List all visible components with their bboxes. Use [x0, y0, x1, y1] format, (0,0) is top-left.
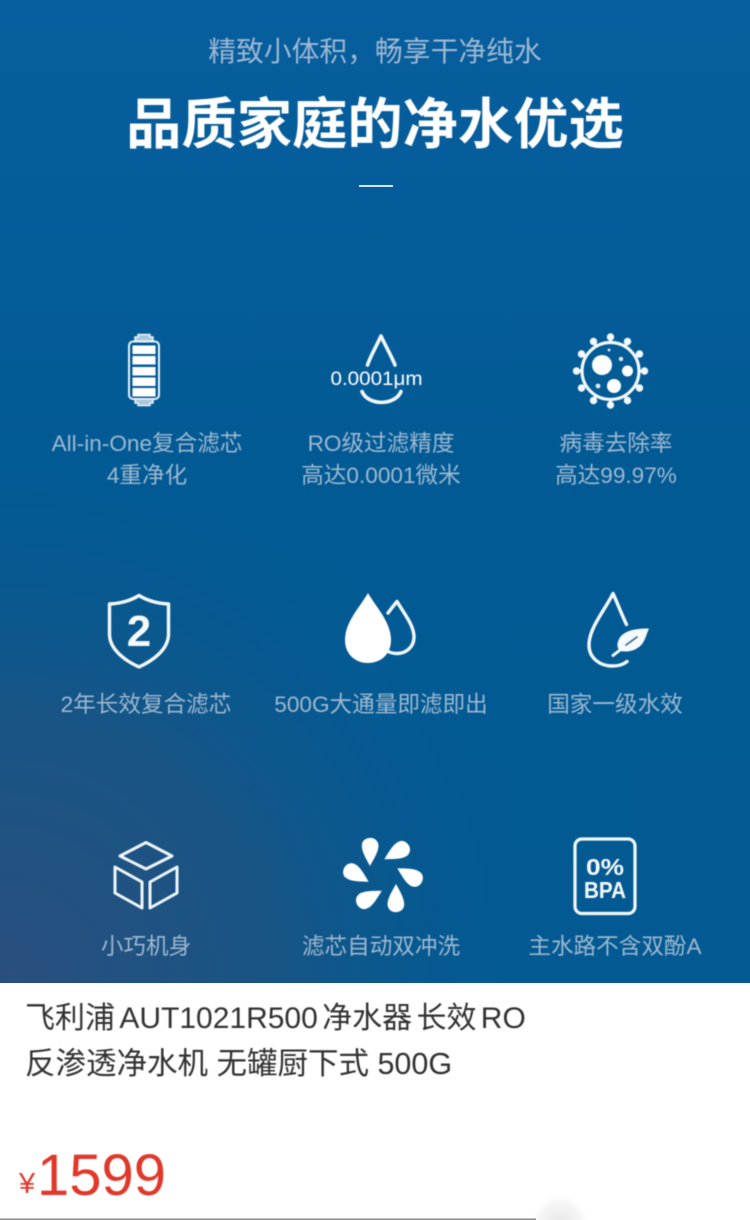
feature: compact body [101, 842, 191, 959]
label: four-stage purification: 4重净化 [107, 463, 187, 488]
icon: droplet with micron value [330, 336, 422, 402]
label: compact body: 小巧机身 [101, 934, 191, 959]
label: all-in-one filter: All-in-One复合滤芯 [52, 431, 242, 456]
price: 1599 [37, 1143, 166, 1208]
icon: 0% BPA badge: BPA [584, 877, 626, 903]
label: auto flush: 滤芯自动双冲洗 [302, 934, 460, 959]
bottom edge smudge [530, 1192, 590, 1220]
feature: BPA free [528, 839, 703, 959]
bottom edge line [0, 1218, 536, 1220]
icon: filter cartridge [129, 334, 159, 406]
label: removal rate: 高达99.97% [555, 463, 677, 488]
panel: product info [0, 983, 750, 1220]
icon: droplet with leaf [589, 594, 649, 666]
feature: two-year filter [61, 596, 231, 717]
feature: water efficiency [547, 594, 683, 717]
price: ¥ [18, 1168, 36, 1200]
icon: virus [574, 335, 647, 407]
product name line 2: 反渗透净水机 无罐厨下式 500G [25, 1047, 452, 1081]
icon: shield with 2 [110, 596, 168, 667]
label: two-year filter: 2年长效复合滤芯 [61, 692, 231, 717]
icon: two droplets [345, 593, 414, 663]
feature: virus removal [555, 335, 677, 488]
feature: all-in-one filter [52, 334, 242, 488]
feature: RO precision [301, 336, 461, 488]
title divider [359, 185, 393, 187]
label: RO precision: RO级过滤精度 [308, 431, 454, 456]
subtitle: 精致小体积，畅享干净纯水 [208, 36, 542, 67]
icon: pinwheel of droplets [340, 838, 426, 912]
icon: droplet with micron value: 0.0001μm [330, 369, 422, 390]
label: water efficiency: 国家一级水效 [547, 692, 683, 717]
label: micron rating: 高达0.0001微米 [301, 463, 461, 488]
main title: 品质家庭的净水优选 [126, 94, 624, 156]
icon: 0% BPA badge: 0% [586, 854, 624, 880]
product name line 1: 飞利浦 AUT1021R500 净水器 长效 RO [25, 1002, 526, 1035]
label: BPA free: 主水路不含双酚A [528, 934, 703, 959]
icon: cube [115, 842, 177, 908]
icon: shield with 2: 2 [127, 607, 151, 656]
feature: high flow [274, 593, 488, 717]
label: high flow: 500G大通量即滤即出 [274, 692, 488, 717]
feature: auto flush [302, 838, 460, 959]
label: virus removal: 病毒去除率 [560, 431, 672, 456]
icon: 0% BPA badge [575, 839, 635, 914]
